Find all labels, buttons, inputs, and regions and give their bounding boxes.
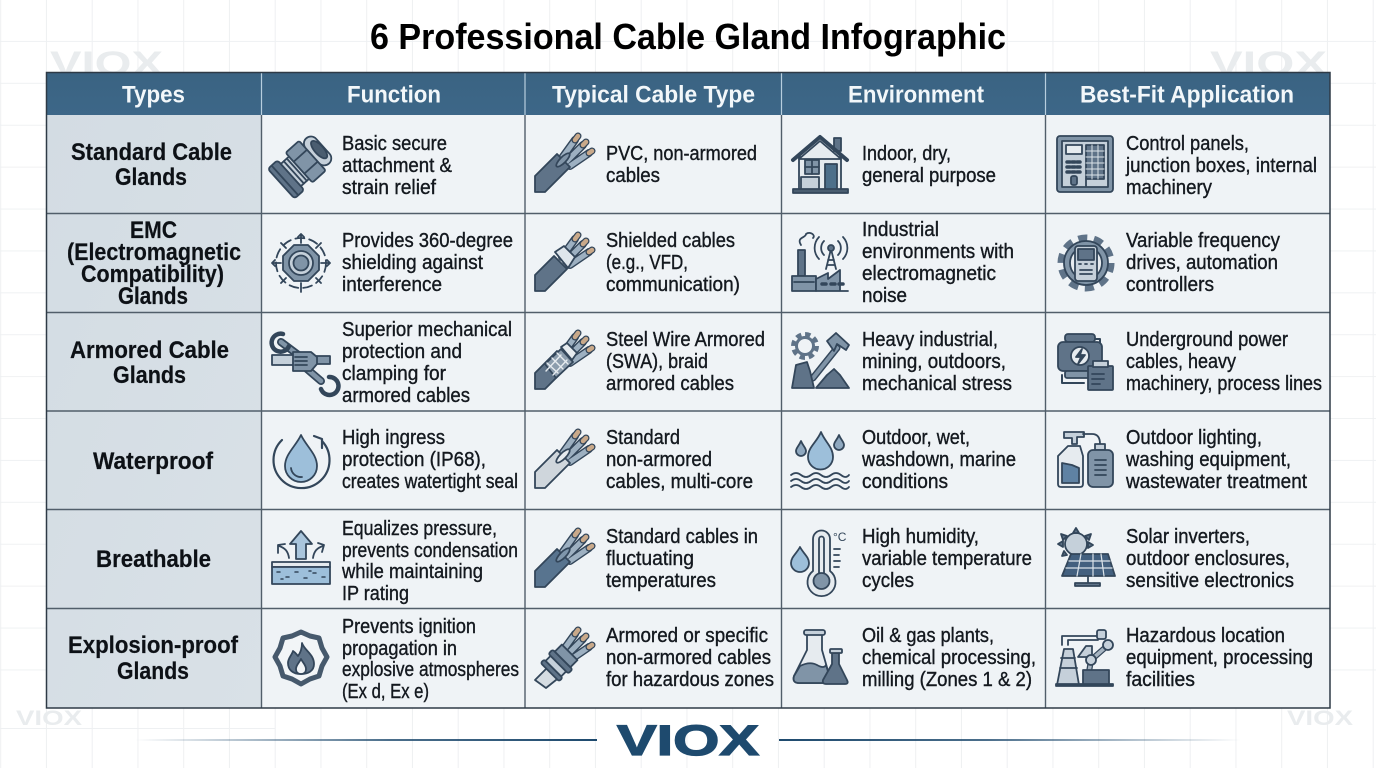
icon: control panel	[1057, 136, 1113, 192]
type name: (Electromagnetic	[67, 239, 241, 266]
environment text: conditions	[862, 471, 948, 493]
type name: Waterproof	[93, 448, 214, 475]
application text: junction boxes, internal	[1125, 155, 1317, 177]
cable text	[606, 427, 753, 493]
cable text: temperatures	[606, 570, 716, 592]
cable text: for hazardous zones	[606, 669, 774, 691]
type name: Glands	[118, 283, 188, 310]
cable text	[606, 143, 757, 187]
application text	[1126, 526, 1294, 592]
type name: Glands	[117, 658, 189, 685]
type name: Standard Cable	[71, 139, 232, 166]
type name	[67, 217, 241, 310]
type name	[71, 139, 232, 191]
application text: Underground power	[1126, 329, 1288, 351]
environment text	[862, 526, 1032, 592]
function text: Prevents ignition	[342, 616, 476, 638]
cable text: (SWA), braid	[606, 351, 708, 373]
environment text: High humidity,	[862, 526, 979, 548]
icon: light multi-core cable	[535, 432, 592, 488]
function text: (Ex d, Ex e)	[342, 681, 429, 703]
function text: Basic secure	[342, 133, 447, 155]
header row: Types	[122, 82, 185, 108]
icon: standard cable	[535, 531, 592, 587]
icon: shielded cable	[535, 235, 592, 291]
cable text: fluctuating	[606, 548, 694, 570]
environment text: cycles	[862, 570, 914, 592]
watermark: top right: VIOX	[1210, 45, 1327, 83]
cable text: (e.g., VFD,	[606, 252, 688, 274]
environment text: Heavy industrial,	[862, 329, 998, 351]
environment text: washdown, marine	[861, 449, 1016, 471]
watermark: bottom left: VIOX	[16, 707, 82, 730]
panel: comparison table	[46, 72, 1330, 708]
application text	[1126, 625, 1313, 691]
function text: while maintaining	[341, 561, 483, 583]
cable text: non-armored cables	[606, 647, 771, 669]
environment text: variable temperature	[862, 548, 1032, 570]
icon: spray bottles	[1058, 432, 1113, 487]
application text: Solar inverters,	[1126, 526, 1250, 548]
row: Breathable	[96, 518, 1294, 605]
application text: cables, heavy	[1126, 351, 1236, 373]
application text: wastewater treatment	[1125, 471, 1307, 493]
cable text: Shielded cables	[606, 230, 735, 252]
icon: PVC cable	[535, 136, 592, 192]
environment text: general purpose	[862, 165, 996, 187]
cable text: Standard	[606, 427, 680, 449]
icon: chemistry flasks	[794, 630, 848, 684]
cable text: non-armored	[606, 449, 712, 471]
application text: facilities	[1126, 669, 1195, 691]
watermark: top left: VIOX	[50, 45, 163, 83]
function text: Superior mechanical	[342, 319, 512, 341]
application text: sensitive electronics	[1126, 570, 1294, 592]
type name: Compatibility)	[81, 261, 224, 288]
function text: attachment &	[342, 155, 453, 177]
environment text: noise	[862, 285, 907, 307]
application text: Hazardous location	[1126, 625, 1285, 647]
cable text	[606, 625, 774, 691]
environment text: electromagnetic	[862, 263, 996, 285]
type name: Glands	[113, 362, 186, 389]
type name	[68, 632, 239, 685]
cable text: Armored or specific	[606, 625, 768, 647]
icon: breathable membrane	[272, 531, 330, 584]
environment text	[862, 329, 1012, 395]
type name: EMC	[130, 217, 177, 244]
function text: protection (IP68),	[342, 449, 486, 471]
cable text: communication)	[606, 274, 740, 296]
environment text: mining, outdoors,	[862, 351, 1006, 373]
icon: motor and control box	[1058, 334, 1113, 390]
function text: High ingress	[342, 427, 445, 449]
environment text: mechanical stress	[862, 373, 1012, 395]
cable text: cables	[606, 165, 660, 187]
function text: Equalizes pressure,	[342, 518, 497, 540]
icon: drops and waves	[791, 432, 849, 489]
icon: gear, hammer and rocks	[792, 333, 849, 388]
application text	[1126, 230, 1280, 296]
function text	[342, 133, 453, 199]
environment text: milling (Zones 1 & 2)	[862, 669, 1032, 691]
environment text	[862, 143, 996, 187]
type name: Breathable	[96, 546, 211, 573]
header row	[46, 72, 1330, 115]
application text: washing equipment,	[1125, 449, 1291, 471]
cable text: Steel Wire Armored	[606, 329, 765, 351]
application text: Variable frequency	[1126, 230, 1280, 252]
application text: machinery, process lines	[1126, 373, 1322, 395]
icon: water drop with seal arrow	[274, 435, 330, 488]
icon: gear with drive	[1061, 238, 1111, 288]
icon: sun and solar panel	[1058, 528, 1115, 586]
header row: Typical Cable Type	[552, 82, 755, 108]
function text: clamping for	[342, 363, 446, 385]
header row: Best-Fit Application	[1080, 82, 1294, 108]
function text: Provides 360-degree	[342, 230, 513, 252]
application text: machinery	[1126, 177, 1212, 199]
application text	[1125, 427, 1307, 493]
cable text: Standard cables in	[606, 526, 758, 548]
cable text	[606, 526, 758, 592]
application text	[1126, 329, 1322, 395]
type name: Armored Cable	[70, 337, 229, 364]
icon: hazardous zone cable gland	[535, 630, 592, 688]
function text	[342, 427, 518, 493]
row: Waterproof	[93, 427, 1307, 493]
icon: thermometer and drop: °C	[833, 530, 847, 544]
application text: Control panels,	[1126, 133, 1249, 155]
function text: prevents condensation	[342, 540, 518, 562]
icon: house	[793, 137, 848, 193]
row: Explosion-proof Glands	[68, 616, 1313, 703]
function text: interference	[342, 274, 442, 296]
icon: hazardous facility with robot arm	[1056, 630, 1113, 686]
function text: IP rating	[342, 583, 409, 605]
function text: propagation in	[342, 638, 457, 660]
cable text	[606, 329, 765, 395]
environment text: Indoor, dry,	[862, 143, 951, 165]
environment text	[862, 625, 1036, 691]
row: Armored Cable Glands	[70, 319, 1322, 407]
title: 6 Professional Cable Gland Infographic	[370, 16, 1006, 57]
application text: outdoor enclosures,	[1126, 548, 1290, 570]
header row: Environment	[848, 82, 984, 108]
icon: armored cable	[535, 333, 592, 389]
row: Standard Cable Glands	[71, 131, 1317, 199]
type name: Glands	[115, 164, 187, 191]
function text: shielding against	[342, 252, 483, 274]
function text: creates watertight seal	[342, 471, 518, 493]
header row: Function	[347, 82, 441, 108]
application text: controllers	[1126, 274, 1214, 296]
icon: factory with antenna	[792, 233, 848, 291]
environment text: Oil & gas plants,	[862, 625, 994, 647]
function text	[342, 319, 512, 407]
environment text: Outdoor, wet,	[862, 427, 970, 449]
function text: armored cables	[342, 385, 470, 407]
function text: protection and	[342, 341, 462, 363]
icon: EMC shielding	[272, 234, 330, 292]
application text: Outdoor lighting,	[1126, 427, 1262, 449]
icon: flame badge	[275, 632, 327, 684]
type name: Explosion-proof	[68, 632, 239, 659]
environment text: environments with	[862, 241, 1014, 263]
cable text: cables, multi-core	[606, 471, 753, 493]
icon: wrenches and clamp	[272, 334, 338, 395]
environment text	[862, 219, 1014, 307]
environment text: Industrial	[862, 219, 939, 241]
type name	[70, 337, 229, 389]
cable text	[606, 230, 740, 296]
icon: cable gland	[268, 131, 336, 199]
function text: explosive atmospheres	[342, 659, 519, 681]
environment text	[861, 427, 1016, 493]
watermark: bottom right: VIOX	[1287, 707, 1353, 730]
footer: VIOX logo with rules: VIOX	[617, 717, 759, 765]
function text: strain relief	[342, 177, 436, 199]
application text	[1125, 133, 1317, 199]
row: EMC Glands	[67, 217, 1280, 310]
cable text: PVC, non-armored	[606, 143, 757, 165]
environment text: chemical processing,	[862, 647, 1036, 669]
function text	[341, 518, 518, 605]
cable text: armored cables	[606, 373, 734, 395]
function text	[342, 616, 519, 703]
application text: drives, automation	[1126, 252, 1278, 274]
function text	[342, 230, 513, 296]
application text: equipment, processing	[1126, 647, 1313, 669]
icon: thermometer and drop	[791, 530, 847, 596]
